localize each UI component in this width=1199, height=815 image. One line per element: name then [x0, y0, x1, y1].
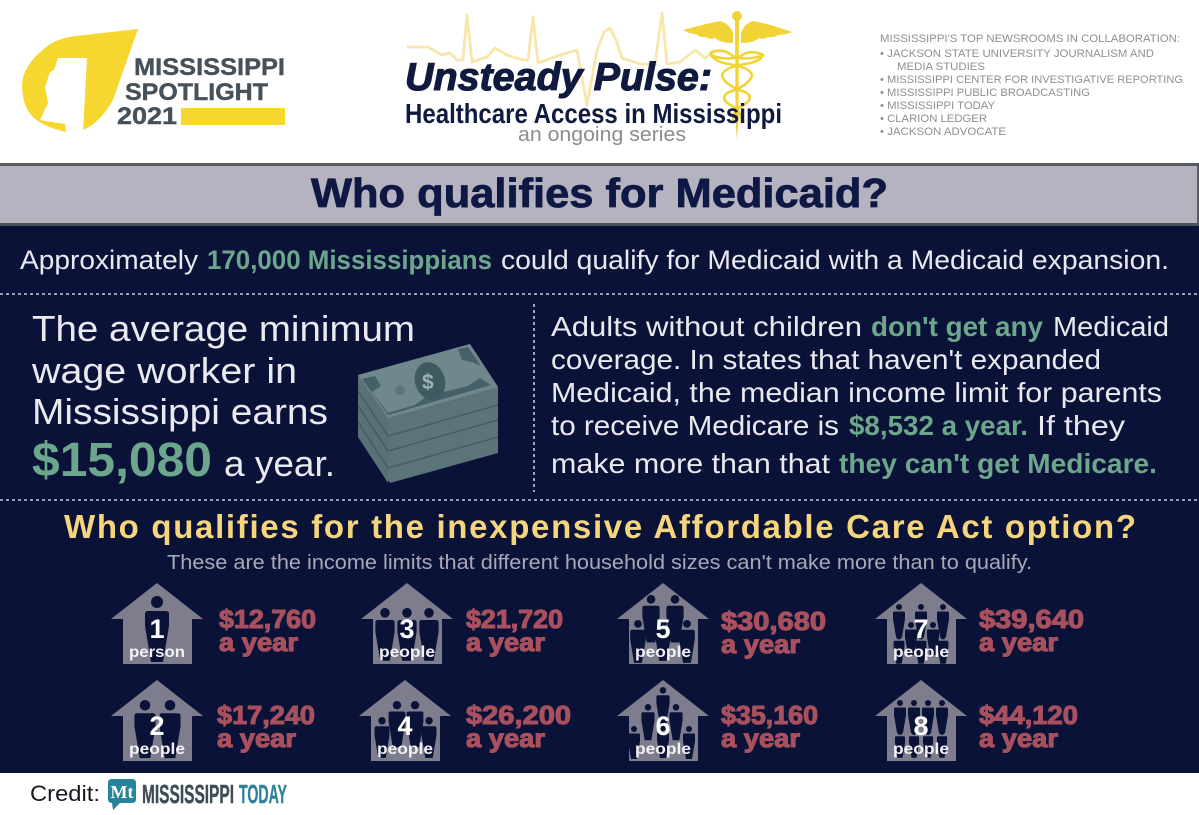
credit line [30, 779, 287, 810]
household 7: $39,640 [979, 604, 1084, 634]
household 4: a year [466, 723, 545, 753]
Medicaid coverage explanation: to receive Medicare is [551, 410, 839, 441]
Medicaid coverage explanation: Medicaid [1053, 311, 1169, 342]
series title: Unsteady Pulse: an ongoing series [518, 124, 686, 146]
icon: caduceus [683, 11, 792, 140]
household 6: people [635, 741, 691, 758]
household 5: a year [721, 629, 800, 659]
Mississippi Spotlight logo: 2021 [117, 103, 177, 130]
household 6: 6 [655, 711, 671, 741]
expansion statement: 170,000 Mississippians [207, 245, 492, 275]
minimum wage text: wage worker in [31, 350, 297, 391]
series title: Unsteady Pulse: Healthcare Access in Mississippi [405, 98, 782, 129]
household 1: a year [219, 627, 298, 657]
minimum wage text: The average minimum [32, 308, 415, 349]
household 8: a year [979, 723, 1058, 753]
household 4: people [377, 741, 433, 758]
household 2: 2 [149, 711, 165, 741]
newsroom collaboration list: • JACKSON STATE UNIVERSITY JOURNALISM AND [880, 48, 1154, 60]
household 7: 7 [913, 614, 929, 644]
household 2: people [129, 741, 185, 758]
household 7: people [893, 644, 949, 661]
household 3: $21,720 [466, 604, 563, 634]
household 8: people [893, 741, 949, 758]
icon: Mississippi Today logo: Mt [111, 782, 133, 802]
Medicaid coverage explanation: $8,532 a year. [849, 410, 1028, 441]
icon: Mississippi Today logo [108, 779, 136, 810]
newsroom collaboration list: MEDIA STUDIES [897, 61, 985, 73]
household 5: $30,680 [721, 606, 826, 636]
Mississippi Spotlight logo: SPOTLIGHT [125, 79, 268, 106]
household 1: $12,760 [219, 604, 316, 634]
household 1: 1 [149, 614, 165, 644]
Medicaid coverage explanation [551, 311, 1169, 479]
household 4: $26,200 [466, 700, 571, 730]
newsroom collaboration list: • MISSISSIPPI PUBLIC BROADCASTING [880, 87, 1090, 99]
credit line: TODAY [239, 779, 287, 809]
household 3: a year [466, 627, 545, 657]
expansion statement: Approximately [20, 245, 199, 275]
Medicaid coverage explanation: make more than that [551, 448, 830, 479]
household 7 [875, 583, 1084, 664]
main navy panel [0, 226, 1199, 773]
icon: stack of money [358, 344, 498, 483]
household 6: a year [721, 723, 800, 753]
household 3: 3 [399, 614, 415, 644]
credit line: MISSISSIPPI [142, 779, 234, 809]
icon: stack of money: $ [422, 371, 434, 394]
minimum wage text: $15,080 [32, 434, 212, 487]
header [22, 11, 1183, 146]
newsroom collaboration list: • MISSISSIPPI TODAY [880, 100, 996, 112]
newsroom collaboration list: MISSISSIPPI'S TOP NEWSROOMS IN COLLABORATION: [880, 33, 1180, 45]
newsroom collaboration list: • CLARION LEDGER [880, 113, 987, 125]
Medicaid coverage explanation: don't get any [871, 311, 1043, 342]
household 3: people [379, 644, 435, 661]
household 5: 5 [655, 614, 671, 644]
minimum wage text: Mississippi earns [32, 391, 328, 432]
expansion statement: could qualify for Medicaid with a Medicaid expansion. [501, 245, 1169, 275]
Medicaid coverage explanation: they can't get Medicare. [839, 448, 1157, 479]
household 1: person [129, 644, 185, 661]
newsroom collaboration list [880, 33, 1183, 138]
minimum wage text [31, 308, 415, 487]
credit line: Credit: [30, 781, 100, 806]
newsroom collaboration list: • MISSISSIPPI CENTER FOR INVESTIGATIVE REPORTING [880, 74, 1183, 86]
newsroom collaboration list: • JACKSON ADVOCATE [880, 126, 1006, 138]
series title: Unsteady Pulse [405, 11, 792, 146]
household 2: a year [217, 723, 296, 753]
household 8: $44,120 [979, 700, 1078, 730]
main heading: Who qualifies for Medicaid? [311, 170, 888, 216]
Medicaid coverage explanation: If they [1037, 410, 1125, 441]
household 2: $17,240 [217, 700, 315, 730]
household 8 [875, 680, 1078, 761]
household 6 [617, 680, 818, 761]
household 8: 8 [913, 711, 929, 741]
ACA heading: Who qualifies for the inexpensive Affordable Care Act option? [64, 508, 1136, 545]
minimum wage text: a year. [224, 443, 335, 484]
title banner [0, 163, 1199, 226]
Medicaid coverage explanation: coverage. In states that haven't expanded [551, 344, 1101, 375]
series title: Unsteady Pulse: Unsteady Pulse: [405, 56, 712, 99]
household 2 [111, 680, 315, 761]
expansion statement [20, 245, 1169, 275]
household 7: a year [979, 627, 1058, 657]
household 4: 4 [397, 711, 413, 741]
household 4 [359, 680, 571, 761]
household 5: people [635, 644, 691, 661]
Medicaid coverage explanation: Medicaid, the median income limit for parents [551, 377, 1162, 408]
household 3 [361, 583, 563, 664]
heartbeat line [407, 13, 715, 105]
ACA subheading: These are the income limits that different household sizes can't make more than to qualify. [167, 552, 1032, 574]
Mississippi Spotlight logo: MISSISSIPPI [134, 54, 285, 81]
Mississippi Spotlight logo [22, 29, 285, 133]
household 1 [111, 583, 316, 664]
Medicaid coverage explanation: Adults without children [551, 311, 862, 342]
household 6: $35,160 [721, 700, 818, 730]
household 5 [617, 583, 826, 664]
